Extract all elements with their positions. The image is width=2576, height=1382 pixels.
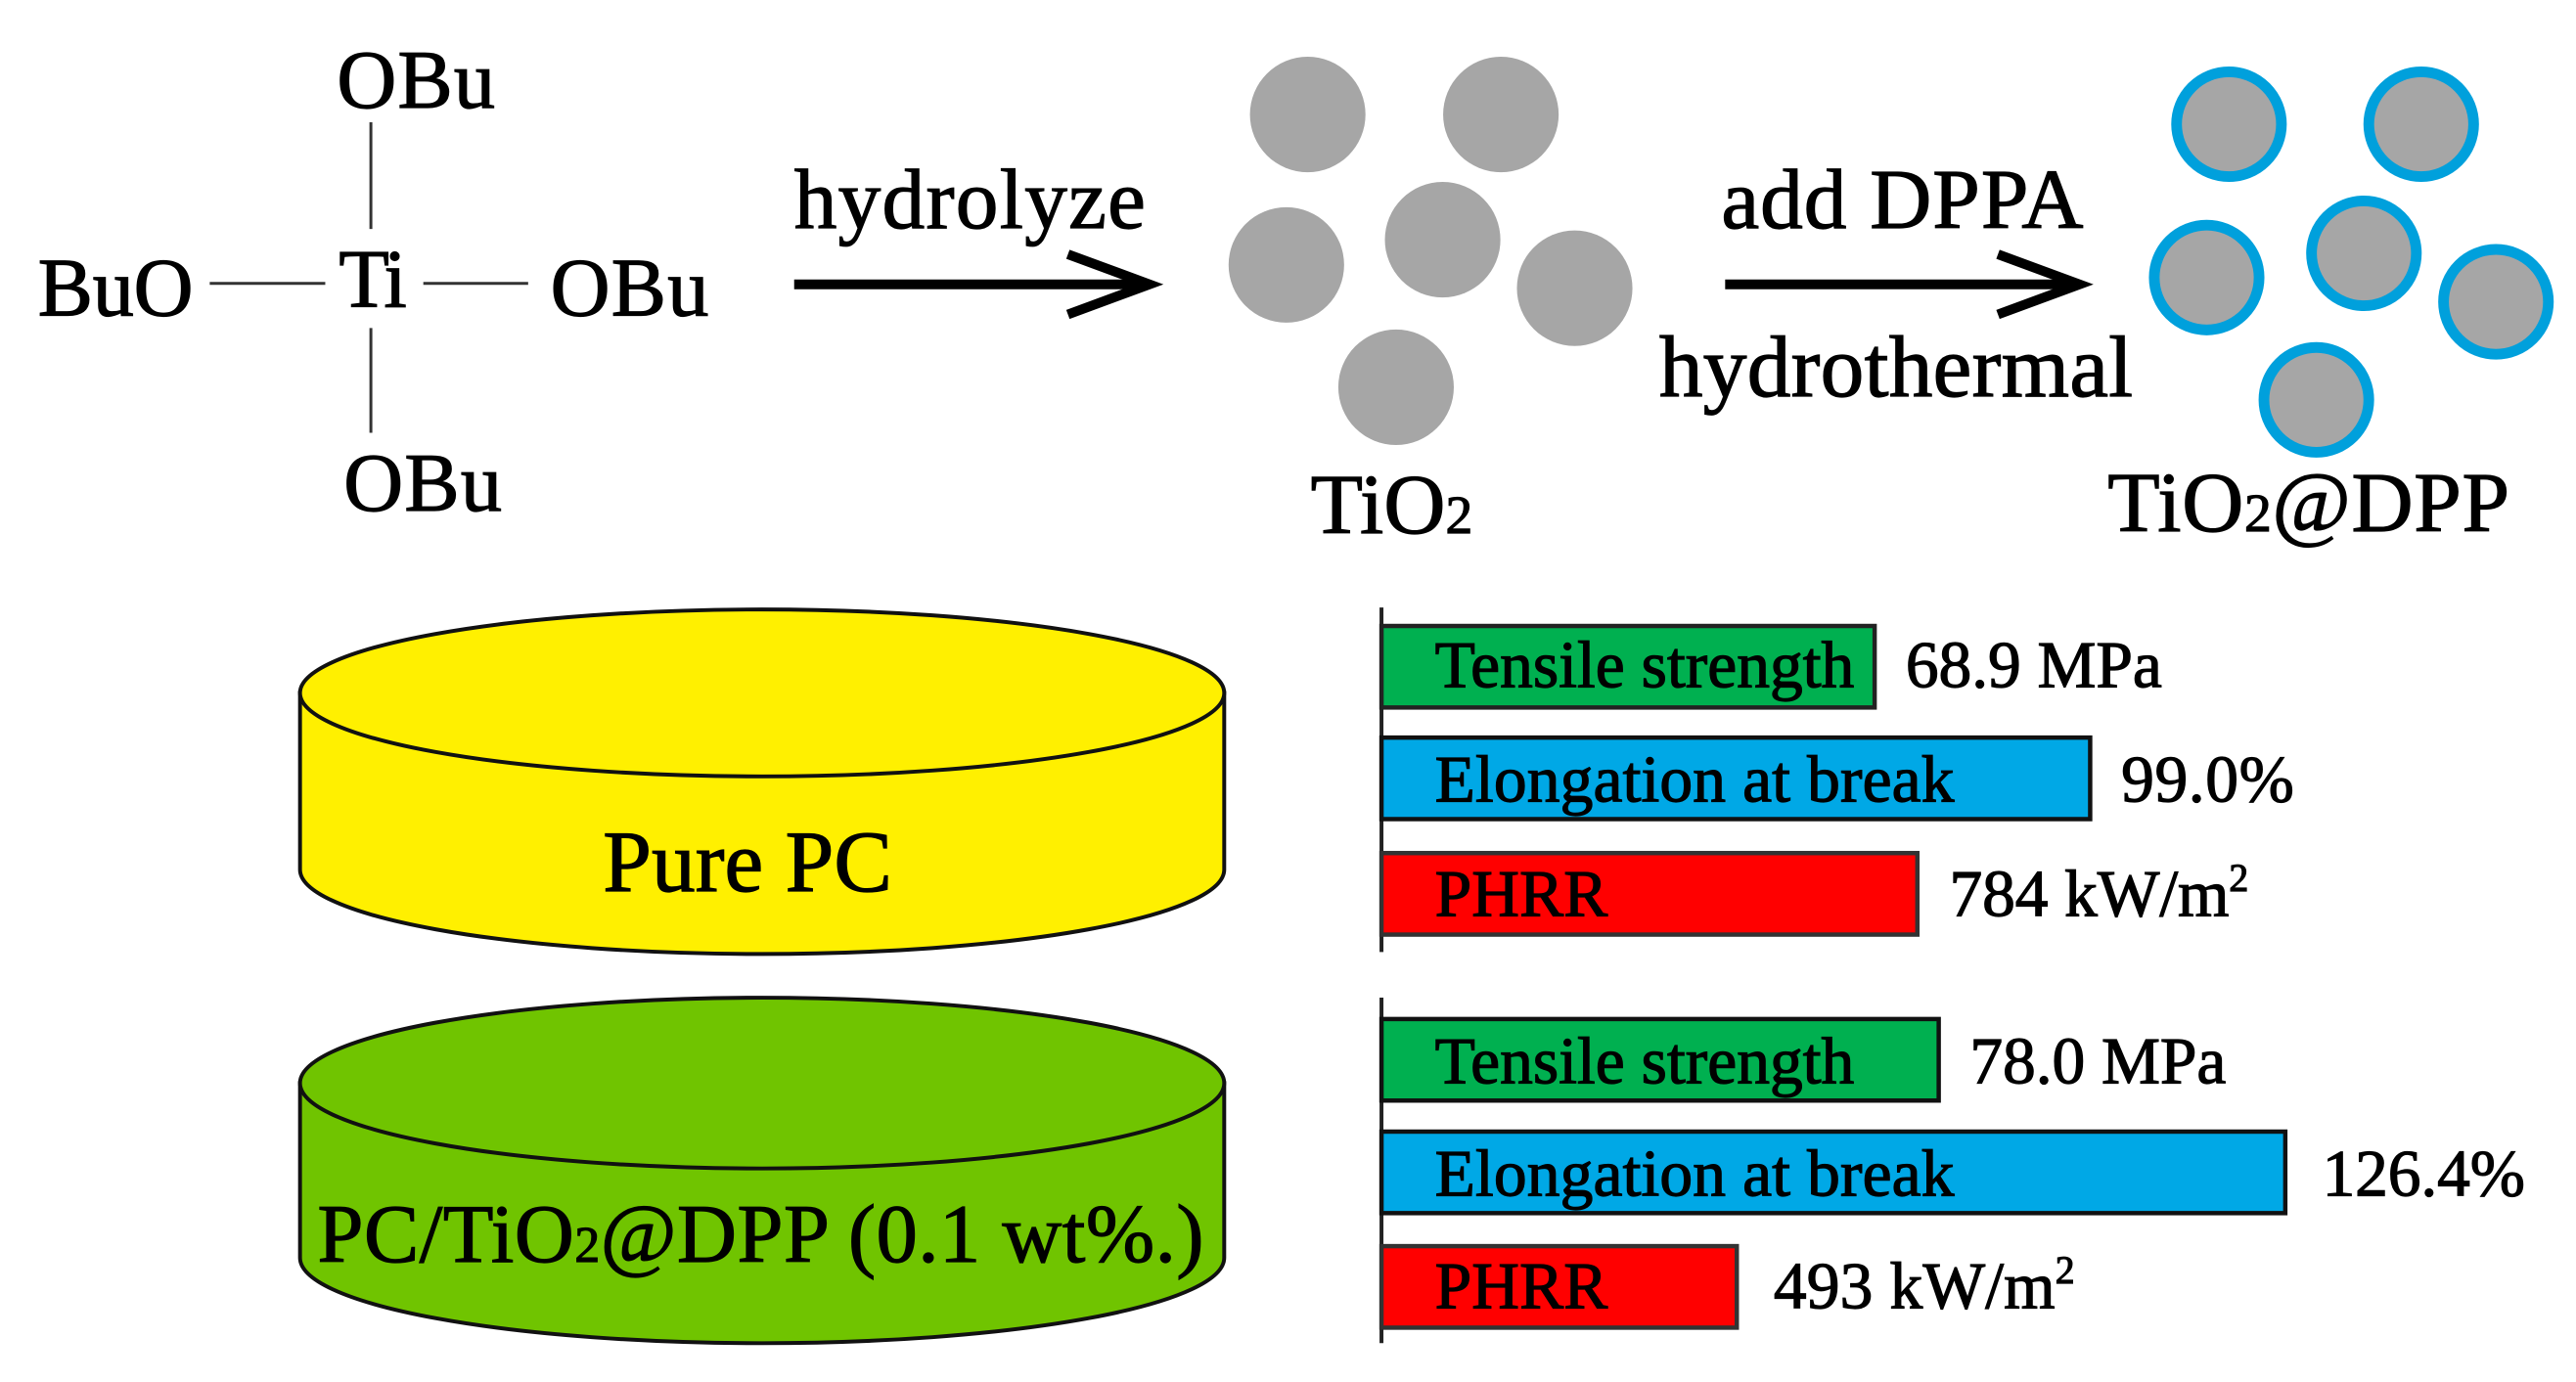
label: right OBu: OBu [551, 243, 708, 334]
value: tensile strength: 68.9 MPa [1906, 629, 2162, 702]
label: PHRR: PHRR [1435, 1250, 1607, 1323]
disc body [300, 1083, 1224, 1343]
label: hydrolyze: hydrolyze [794, 152, 1146, 246]
bar: tensile strength [1381, 1019, 1939, 1100]
label: tensile strength: Tensile strength [1435, 629, 1854, 702]
value: elongation at break: 99.0% [2121, 743, 2294, 817]
label: PHRR: PHRR [1435, 858, 1607, 931]
label: elongation at break: Elongation at break [1435, 1137, 1955, 1210]
label: bottom OBu: OBu [343, 438, 502, 529]
particles: TiO2 [1229, 57, 1633, 445]
bond: bottom [370, 328, 373, 433]
bar: tensile strength [1381, 626, 1875, 707]
particles: TiO2@DPP coated [2154, 71, 2549, 452]
disc: Pure PC [300, 609, 1224, 954]
label: top OBu: OBu [337, 35, 495, 126]
label: elongation at break: Elongation at break [1435, 743, 1955, 817]
disc body [300, 692, 1224, 954]
bar: elongation at break [1381, 737, 2090, 819]
label: Pure PC: Pure PC [603, 814, 892, 911]
bar: PHRR [1381, 853, 1918, 935]
label: TiO2: TiO2 [1311, 457, 1472, 552]
value: elongation at break: 126.4% [2323, 1137, 2525, 1210]
axis [1379, 607, 1383, 952]
bar: PHRR [1381, 1246, 1737, 1327]
bond: left [209, 282, 325, 285]
value: PHRR: 493 kW/m [1774, 1250, 2056, 1323]
disc top [300, 609, 1224, 777]
bar chart: Pure PC properties [1381, 607, 2294, 952]
value: tensile strength: 78.0 MPa [1969, 1024, 2226, 1097]
label: Ti: Ti [339, 235, 407, 326]
bar chart: PC/TiO2@DPP properties [1381, 998, 2525, 1343]
label: tensile strength: Tensile strength [1435, 1024, 1854, 1097]
arrow: add DPPA [1725, 254, 2080, 314]
label: PC/TiO2@DPP: PC/TiO2@DPP (0.1 wt%.) [318, 1189, 1203, 1280]
value: PHRR: 2 [2056, 1249, 2075, 1292]
bar: elongation at break [1381, 1132, 2285, 1213]
axis [1379, 998, 1383, 1343]
label: add DPPA: add DPPA [1721, 152, 2083, 246]
disc top [300, 998, 1224, 1169]
value: PHRR: 2 [2229, 857, 2248, 900]
value: PHRR: 784 kW/m [1950, 858, 2229, 931]
arrow: hydrolyze [794, 254, 1150, 314]
label: hydrothermal: hydrothermal [1659, 319, 2133, 416]
chemical structure: titanium butoxide [38, 35, 708, 529]
label: left BuO: BuO [38, 243, 194, 334]
label: TiO2@DPP: TiO2@DPP [2107, 455, 2509, 550]
bond: right [424, 282, 528, 285]
disc: PC/TiO2@DPP [300, 998, 1224, 1343]
bond: top [370, 122, 373, 229]
